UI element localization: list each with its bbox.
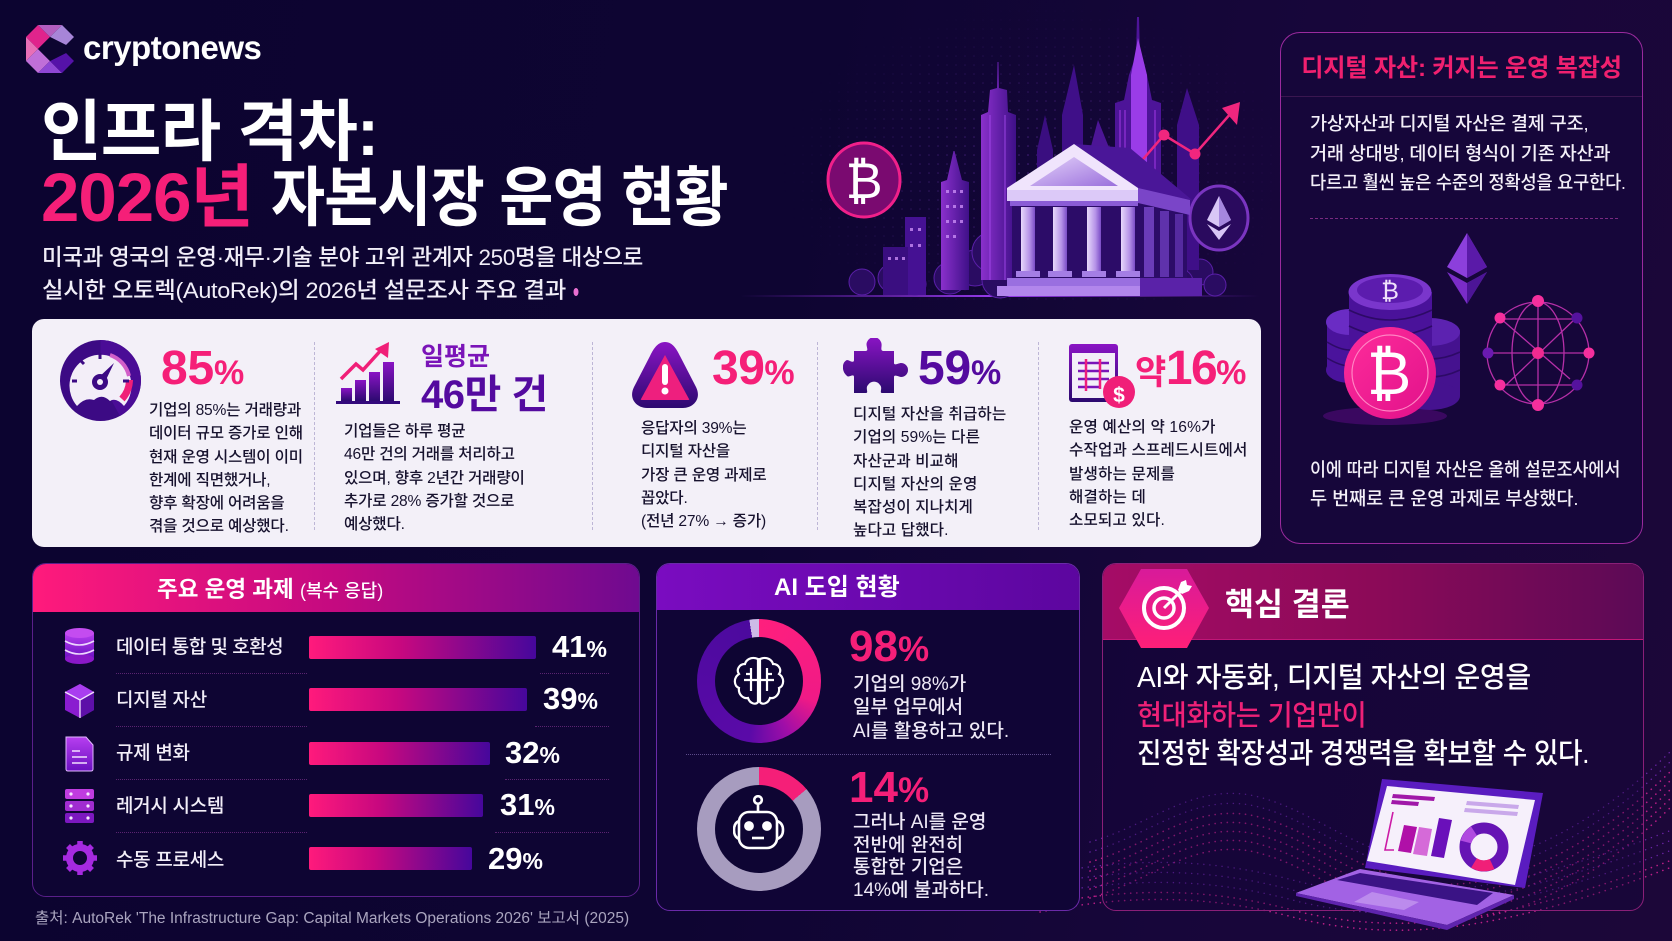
ethereum coin	[1190, 186, 1248, 250]
description: 14 percent: 14%에 불과하다.	[853, 880, 989, 901]
coin stack	[1323, 274, 1460, 425]
description: 14 percent: 그러나 AI를 운영	[853, 812, 986, 833]
bar chart: challenges	[63, 628, 609, 876]
ethereum diamond	[1447, 233, 1487, 304]
icon: gear	[63, 841, 97, 875]
description: 자산군과 비교해	[853, 453, 959, 470]
panel: key stats	[32, 319, 1261, 547]
panel: main operational challenges	[32, 563, 640, 897]
closing text	[1310, 459, 1620, 509]
body text: 가상자산과 디지털 자산은 결제 구조,	[1310, 113, 1588, 134]
description: 추가로 28% 증가할 것으로	[344, 493, 514, 510]
conclusion text: 현대화하는 기업만이	[1137, 700, 1366, 732]
logo: cryptonews	[26, 25, 261, 73]
description: 발생하는 문제를	[1069, 466, 1175, 483]
bitcoin coin	[828, 143, 900, 217]
figure: 약 16%	[1135, 342, 1246, 395]
icon glyph: dollar: $	[1113, 384, 1125, 407]
icon: rising bar chart	[336, 342, 400, 404]
illustration: laptop dashboard	[1296, 779, 1543, 930]
header title: 주요 운영 과제 (복수 응답)	[157, 577, 383, 602]
description: 응답자의 39%는	[641, 420, 746, 437]
row label: regulatory change: 규제 변화	[116, 743, 190, 764]
towers	[883, 17, 1199, 295]
description: 기업의 59%는 다른	[853, 429, 980, 446]
panel heading	[1281, 33, 1642, 97]
row bar: 31 percent	[309, 794, 483, 817]
figure: 59%	[918, 342, 1001, 395]
icon: cryptonews hexagon mark	[26, 25, 74, 73]
description: 46만 건의 거래를 처리하고	[344, 446, 515, 463]
stat: 59 percent	[843, 338, 1006, 539]
row label: manual processes: 수동 프로세스	[116, 850, 224, 871]
description: 수작업과 스프레드시트에서	[1069, 442, 1247, 459]
stat: daily 460k trades	[336, 342, 548, 533]
horizon	[740, 295, 1260, 297]
icon: spreadsheet with dollar	[1069, 344, 1135, 408]
row label: data integration: 데이터 통합 및 호환성	[116, 637, 283, 658]
description: 14 percent: 전반에 완전히	[853, 835, 963, 856]
description: 디지털 자산을	[641, 443, 730, 460]
description: 향후 확장에 어려움을	[149, 495, 285, 512]
description	[853, 406, 1006, 539]
closing text: 이에 따라 디지털 자산은 올해 설문조사에서	[1310, 459, 1620, 480]
row bar: 32 percent	[309, 742, 490, 765]
panel: digital assets complexity	[1280, 32, 1643, 544]
subtitle: 미국과 영국의 운영·재무·기술 분야 고위 관계자 250명을 대상으로	[42, 245, 643, 270]
row bar: 41 percent	[309, 636, 536, 659]
panel: AI adoption	[656, 563, 1080, 911]
title line 1: 인프라 격차:	[41, 95, 378, 170]
conclusion text: 진정한 확장성과 경쟁력을 확보할 수 있다.	[1137, 738, 1589, 770]
logo wordmark: cryptonews	[83, 29, 261, 66]
figure: 98 percent: 98%	[849, 622, 929, 671]
description: 있으며, 향후 2년간 거래량이	[344, 470, 525, 487]
panel heading: 디지털 자산: 커지는 운영 복잡성	[1301, 55, 1622, 82]
row icons	[63, 628, 97, 875]
conclusion text	[1137, 659, 1621, 773]
description: 기업의 85%는 거래량과	[149, 402, 301, 419]
background dotted waves	[812, 20, 1670, 931]
subtitle: 실시한 오토렉(AutoRek)의 2026년 설문조사 주요 결과	[42, 278, 566, 302]
description: 꼽았다.	[641, 490, 688, 507]
stat: 85 percent	[60, 340, 303, 535]
description	[344, 423, 525, 533]
network globe	[1482, 295, 1594, 411]
title	[41, 95, 728, 236]
stat: about 16 percent	[1069, 342, 1247, 529]
icon: brain	[734, 656, 784, 705]
donut: 98 percent	[697, 619, 821, 743]
closing text: 두 번째로 큰 운영 과제로 부상했다.	[1310, 488, 1578, 509]
description: (전년 27% → 증가)	[641, 513, 766, 530]
description: 98 percent: AI를 활용하고 있다.	[853, 721, 1009, 742]
description	[641, 420, 767, 530]
growth arrow	[1138, 102, 1240, 165]
conclusion text: AI와 자동화, 디지털 자산의 운영을	[1137, 662, 1531, 694]
icon: document	[66, 737, 93, 771]
description: 98 percent: 일부 업무에서	[853, 697, 963, 718]
body text: 거래 상대방, 데이터 형식이 기존 자산과	[1310, 143, 1610, 164]
description: 현재 운영 시스템이 이미	[149, 449, 303, 466]
bitcoin coin: ₿	[845, 153, 883, 209]
panel header	[33, 564, 639, 612]
figure: 14 percent: 14%	[849, 763, 929, 812]
description: 기업들은 하루 평균	[344, 423, 465, 440]
hero illustration: bank and city skyline with crypto coins	[574, 17, 1250, 298]
source note: 출처: AutoRek 'The Infrastructure Gap: Capital Markets Operations 2026' 보고서 (2025)	[35, 910, 629, 927]
icon: robot	[733, 795, 784, 850]
coin stack: ₿	[1367, 340, 1411, 407]
description: 14 percent: 통합한 기업은	[853, 857, 963, 878]
coin stack: ₿	[1381, 278, 1399, 305]
icon: cube	[65, 684, 94, 718]
description: 해결하는 데	[1069, 489, 1146, 506]
description: 14 percent	[853, 812, 989, 903]
title line 2 -rest: 자본시장 운영 현황	[271, 161, 728, 234]
description: 높다고 답했다.	[853, 522, 949, 539]
icon: speedometer	[60, 340, 141, 421]
description: 겪을 것으로 예상했다.	[149, 518, 289, 535]
description: 98 percent	[853, 674, 1009, 742]
row value: 29 percent: 29%	[488, 841, 543, 876]
body text	[1310, 113, 1626, 193]
description: 가장 큰 운영 과제로	[641, 467, 767, 484]
donut: 14 percent	[697, 767, 821, 891]
row label: digital assets: 디지털 자산	[116, 690, 207, 711]
row value: 39 percent: 39%	[543, 681, 598, 716]
stat: 39 percent	[632, 342, 795, 530]
row value: 41 percent: 41%	[552, 629, 607, 664]
description	[1069, 419, 1247, 529]
header title: 핵심 결론	[1225, 586, 1350, 622]
subtitle	[42, 245, 643, 302]
description: 소모되고 있다.	[1069, 512, 1165, 529]
description: 한계에 직면했거나,	[149, 472, 270, 489]
row bar: 29 percent	[309, 847, 472, 870]
panel header	[1103, 564, 1643, 640]
icon: warning triangle	[632, 342, 698, 408]
panel header	[657, 564, 1079, 610]
description: 디지털 자산을 취급하는	[853, 406, 1006, 423]
body text: 다르고 훨씬 높은 수준의 정확성을 요구한다.	[1310, 172, 1626, 193]
panel: key conclusion	[1102, 563, 1644, 911]
icon: puzzle piece	[843, 338, 908, 393]
description: 복잡성이 지나치게	[853, 499, 973, 516]
description: 데이터 규모 증가로 인해	[149, 425, 303, 442]
description	[149, 402, 303, 535]
figure label: 일평균	[421, 343, 490, 371]
illustration: coin stack, ethereum, network	[1323, 233, 1594, 425]
header title: AI 도입 현황	[774, 574, 900, 601]
figure: 85%	[161, 342, 244, 395]
description: 디지털 자산의 운영	[853, 476, 977, 493]
description: 98 percent: 기업의 98%가	[853, 674, 966, 695]
row value: 32 percent: 32%	[505, 735, 560, 770]
figure: 46만 건	[421, 373, 548, 417]
description: 운영 예산의 약 16%가	[1069, 419, 1216, 436]
icon: database	[65, 628, 94, 664]
row bar: 39 percent	[309, 688, 527, 711]
bank building	[997, 144, 1202, 296]
row label: legacy systems: 레거시 시스템	[116, 796, 224, 817]
description: 예상했다.	[344, 516, 405, 533]
icon: servers	[65, 789, 94, 823]
row value: 31 percent: 31%	[500, 787, 555, 822]
title line 2 -year: 2026년	[41, 159, 253, 236]
figure: 39%	[712, 342, 795, 395]
